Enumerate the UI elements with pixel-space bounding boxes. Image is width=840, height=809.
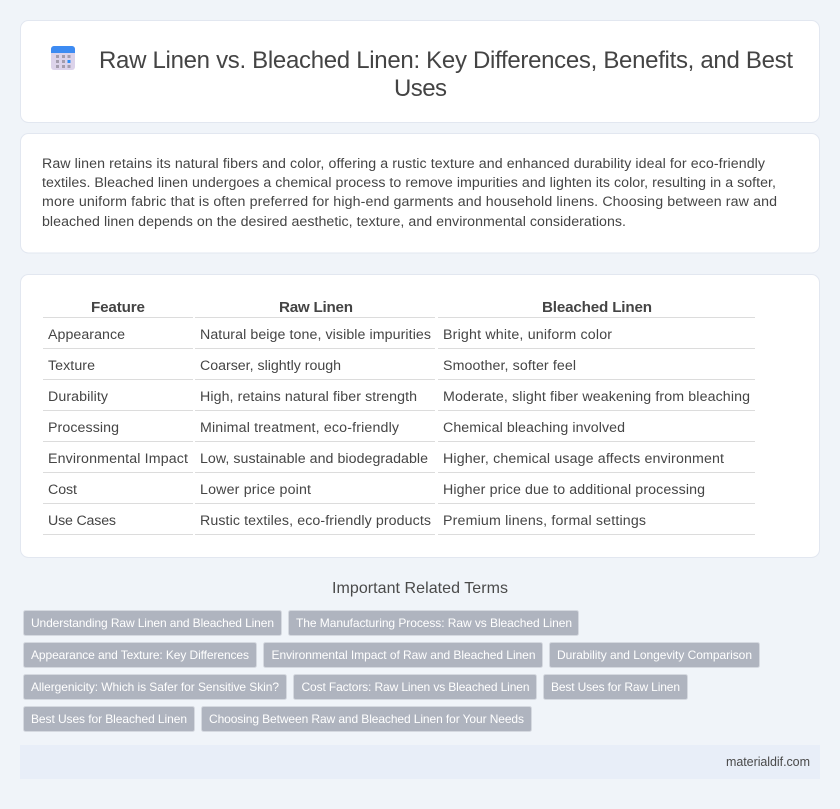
row: texture: Smoother, softer feel: [443, 358, 576, 374]
footer: [20, 745, 820, 779]
tag: [24, 642, 256, 668]
tag: Understanding Raw Linen and Bleached Linen: [31, 616, 274, 630]
intro text: bleached linen depends on the desired aesthetic, texture, and environmental considerations.: [42, 214, 626, 230]
row: appearance: Bright white, uniform color: [443, 327, 612, 343]
panel: comparison table: [20, 274, 820, 558]
row: cost: Cost: [48, 482, 77, 498]
row: texture: Coarser, slightly rough: [200, 358, 341, 374]
row: durability: [48, 389, 750, 405]
row: environmental impact: Low, sustainable and biodegradable: [200, 451, 428, 467]
tag: [550, 642, 760, 668]
icon: calendar: [51, 46, 75, 70]
row: environmental impact: Environmental Impact: [48, 451, 188, 467]
row: environmental impact: [48, 451, 724, 467]
tag: [294, 674, 536, 700]
tag: Cost Factors: Raw Linen vs Bleached Linen: [302, 680, 530, 694]
tag: [24, 610, 282, 636]
row: durability: High, retains natural fiber strength: [200, 389, 417, 405]
table header: Feature: [91, 299, 145, 316]
footer source text: materialdif.com: [726, 755, 810, 769]
row: durability: Durability: [48, 389, 109, 405]
tag: Appearance and Texture: Key Differences: [31, 648, 249, 662]
row: texture: Texture: [48, 358, 95, 374]
row: environmental impact: Higher, chemical usage affects environment: [443, 451, 724, 467]
tag: Allergenicity: Which is Safer for Sensitive Skin?: [31, 680, 279, 694]
tag: [288, 610, 578, 636]
row: cost: Lower price point: [200, 482, 311, 498]
tag: Best Uses for Raw Linen: [551, 680, 680, 694]
tag: [202, 706, 532, 732]
panel: introduction: [20, 134, 820, 253]
tag: Choosing Between Raw and Bleached Linen for Your Needs: [209, 712, 524, 726]
row: durability: Moderate, slight fiber weakening from bleaching: [443, 389, 750, 405]
row: appearance: Natural beige tone, visible impurities: [200, 327, 431, 343]
row: cost: Higher price due to additional processing: [443, 482, 705, 498]
tag: Environmental Impact of Raw and Bleached Linen: [272, 648, 536, 662]
row: use cases: Premium linens, formal settings: [443, 513, 646, 529]
row: texture: [48, 358, 576, 374]
table rules: [43, 318, 755, 534]
title: Uses: [394, 75, 447, 102]
intro text: textiles. Bleached linen undergoes a chemical process to remove impurities and lighten its color, resulting in a softer,: [42, 175, 776, 191]
tag: Best Uses for Bleached Linen: [31, 712, 187, 726]
row: appearance: [48, 327, 612, 343]
tag: Durability and Longevity Comparison: [557, 648, 752, 662]
intro text: Raw linen retains its natural fibers and color, offering a rustic texture and enhanced durability ideal for eco-friendly: [42, 156, 766, 172]
table header: Bleached Linen: [542, 299, 652, 316]
tag: [544, 674, 688, 700]
row: use cases: [48, 513, 646, 529]
title: Raw Linen vs. Bleached Linen: Key Differences, Benefits, and Best: [99, 47, 793, 74]
tag: [24, 674, 286, 700]
tag: [24, 706, 194, 732]
table header: Raw Linen: [279, 299, 353, 316]
row: use cases: Use Cases: [48, 513, 116, 529]
row: appearance: Appearance: [48, 327, 125, 343]
intro text: more uniform fabric that is often preferred for high-end garments and household linens. Choosing between raw and: [42, 194, 777, 210]
row: processing: Processing: [48, 420, 119, 436]
row: processing: Minimal treatment, eco-friendly: [200, 420, 400, 436]
related term tags: [24, 610, 760, 732]
row: processing: [48, 420, 625, 436]
heading: important related terms: Important Related Terms: [332, 580, 508, 597]
row: use cases: Rustic textiles, eco-friendly products: [200, 513, 431, 529]
table header: [91, 299, 652, 316]
row: processing: Chemical bleaching involved: [443, 420, 625, 436]
tag: The Manufacturing Process: Raw vs Bleached Linen: [296, 616, 572, 630]
tag: [264, 642, 542, 668]
header panel: [20, 20, 820, 122]
row: cost: [48, 482, 705, 498]
